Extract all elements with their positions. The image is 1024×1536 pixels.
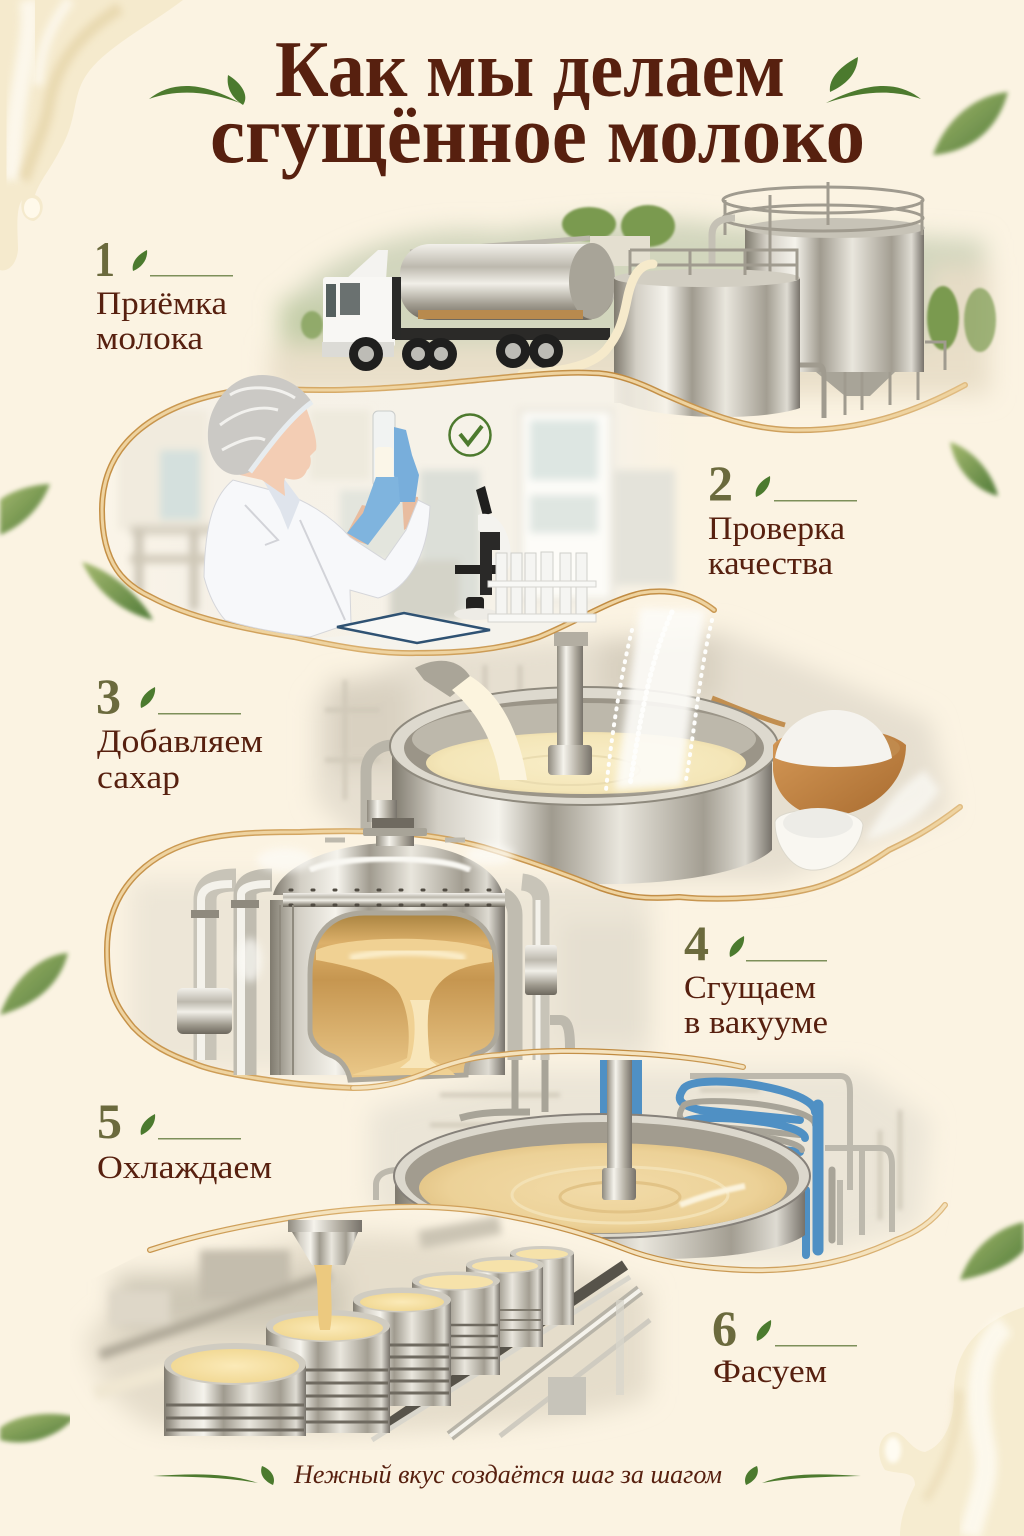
title ornament: left sprig [149,75,245,105]
step 6 label [712,1300,857,1390]
vat body [395,1180,805,1259]
bolted band [283,890,505,907]
step 1 label: 1 [94,231,115,287]
scene 5: cooling vat [370,1060,930,1260]
footer tagline: Нежный вкус создаётся шаг за шагом [293,1460,722,1489]
vessel dome [273,843,503,895]
steam wisps [238,845,514,982]
clipboard [337,613,490,643]
check mark badge [450,414,490,456]
grey piping [376,1076,892,1245]
small sugar bowl [775,808,863,870]
can 1 [164,1343,306,1436]
milk splash: top left [0,0,183,270]
test tube rack [488,552,596,622]
can 4 [412,1272,500,1375]
filling nozzle and stream [288,1220,362,1330]
pouring milk [415,661,527,780]
scene 3: adding sugar [315,608,950,884]
step 3 label: Добавляем [97,724,263,760]
vat rim and product [394,1114,810,1238]
tanker truck [322,238,615,371]
ribbon: upper around vessel [107,807,960,1088]
title [210,26,865,180]
top flange and inlet [325,800,465,846]
milk hose [522,264,653,374]
conveyor rails [372,1265,650,1440]
step 2 label [708,455,857,582]
step 3 label [96,668,263,796]
ribbon: lower edge [353,1051,743,1088]
can 5 [466,1256,544,1347]
step 4 label: в вакууме [684,1005,828,1041]
lab backdrop [121,376,691,650]
front tank [614,250,800,417]
falling sugar [606,608,712,790]
microscope [454,486,511,620]
cooling coils [600,1060,832,1255]
backdrop inside ribbon [133,834,653,1067]
step 5 label: 5 [97,1093,122,1149]
step 2 label: качества [708,546,833,582]
ribbon: around lab [102,373,965,653]
vertical straps [280,905,293,1075]
step 5 label [97,1093,272,1186]
step 1 label: молока [96,321,203,357]
scene 2: laboratory quality check [95,370,965,660]
agitator shaft [602,1060,636,1200]
scene 6: filling cans [60,1195,950,1455]
can 6 [510,1246,574,1325]
factory backdrop [315,630,950,880]
right pipework [503,882,570,1060]
bracket [548,1377,586,1415]
step 4 label: 4 [684,915,709,971]
left pipework [177,880,272,1075]
dome highlight [310,859,470,870]
step 1 label: Приёмка [96,286,227,322]
step 2 label: 2 [708,455,733,511]
step 5 label: Охлаждаем [97,1150,272,1186]
ribbon: above cans [150,1205,945,1270]
wooden bowl of sugar [773,710,906,817]
spilled sugar [865,770,940,840]
factory backdrop [370,1070,930,1260]
window with thick milk [310,913,497,1080]
scene 4: vacuum evaporator [100,800,960,1095]
scientist [204,375,430,637]
agitator shaft [548,632,592,775]
scene 1: truck and storage tanks [270,182,996,418]
step 1 label [94,231,233,357]
can 3 [353,1288,451,1406]
backdrop below ribbon [70,1210,654,1438]
step 3 label: 3 [96,668,121,724]
step 2 label: Проверка [708,511,845,547]
step 6 label: Фасуем [713,1354,827,1390]
milk splash: bottom right [879,1307,1024,1536]
step 6 label: 6 [712,1300,737,1356]
title: Как мы делаем [275,26,785,114]
landscape background [270,205,996,395]
vessel body [270,900,505,1075]
rear tank [712,182,945,418]
footer tagline [153,1460,861,1489]
step 4 label: Сгущаем [684,970,816,1006]
title ornament: right sprig [826,57,921,103]
mixing vat [366,687,778,884]
rear valves [460,1060,545,1118]
title: сгущённое молоко [210,89,865,180]
wooden paddle rim behind bowl [712,698,785,725]
can 2 [266,1310,390,1433]
step 3 label: сахар [97,760,180,796]
step 4 label [684,915,828,1041]
